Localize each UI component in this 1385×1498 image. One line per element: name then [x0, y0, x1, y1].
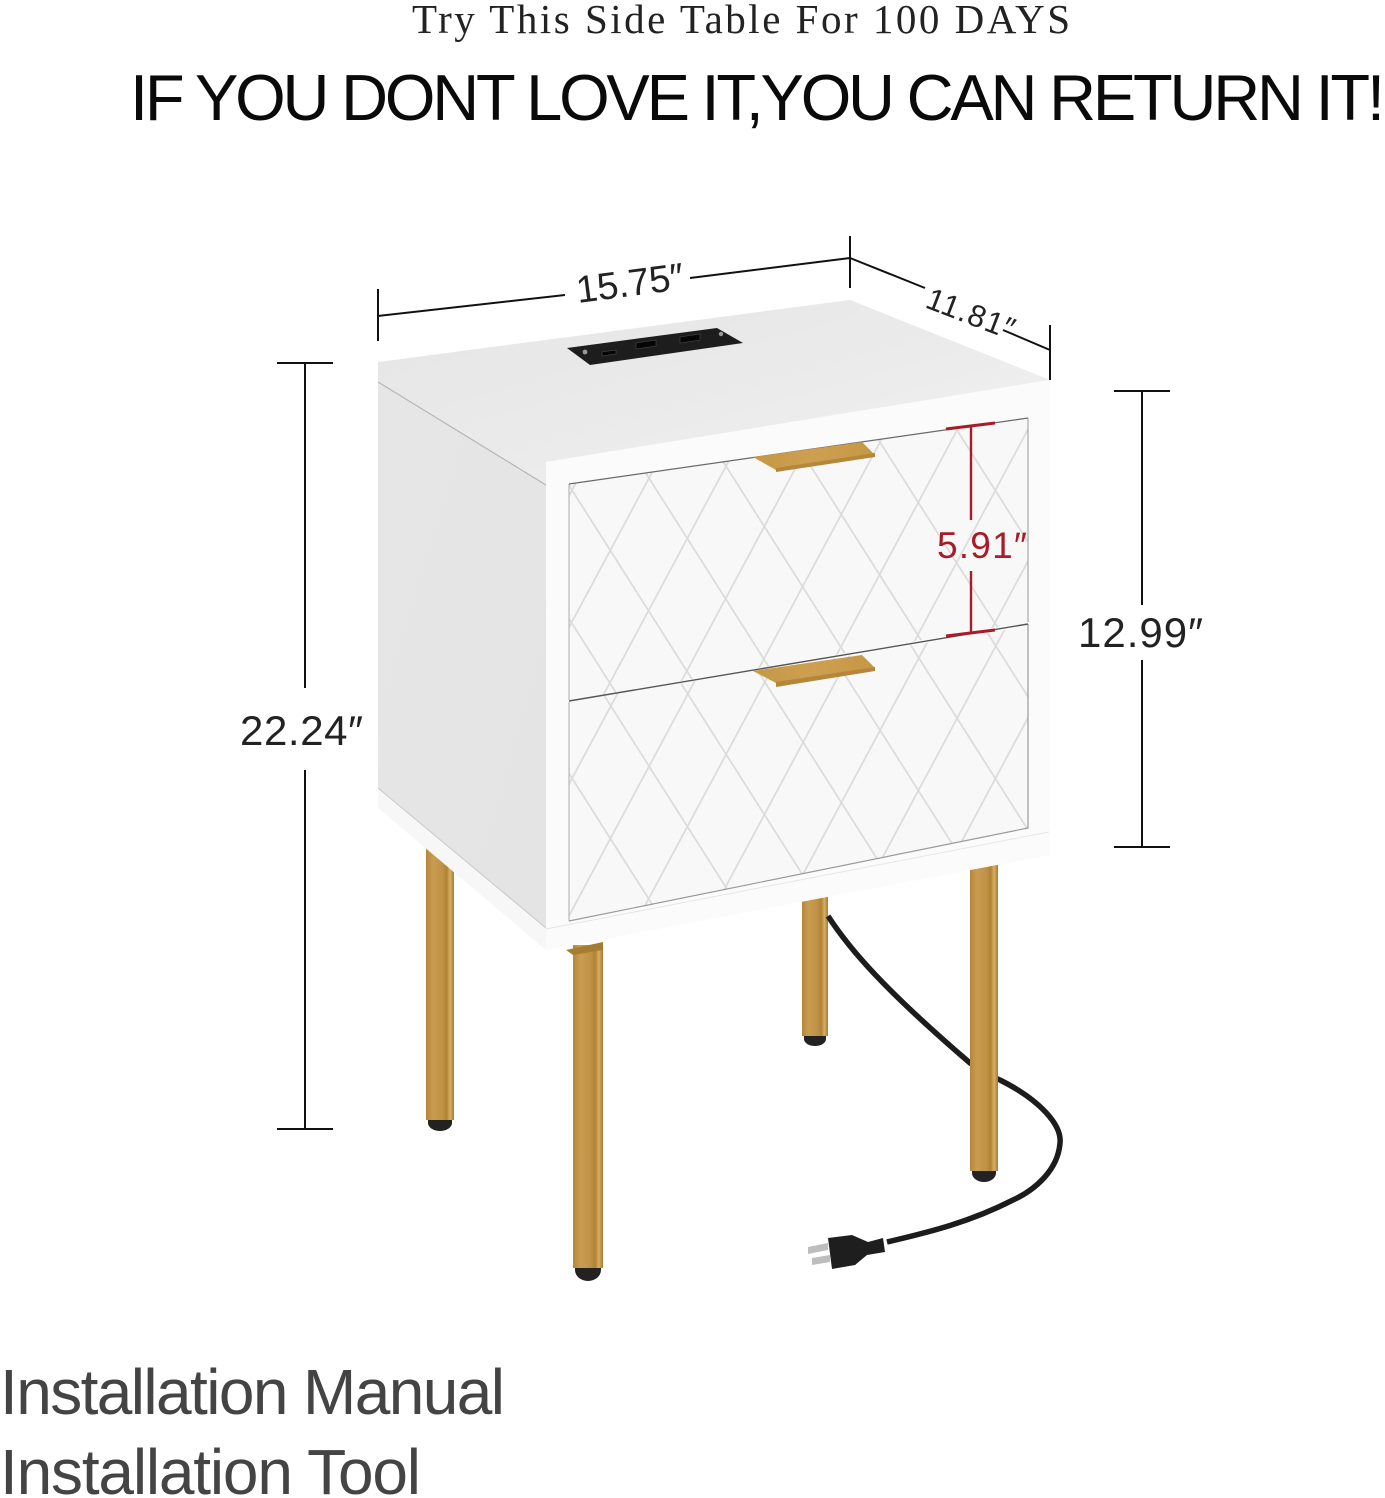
right front leg — [970, 855, 998, 1182]
lower drawer — [568, 623, 1029, 922]
included item: installation manual: Installation Manual — [0, 1356, 505, 1428]
dimension: depth 11.81 — [850, 258, 1050, 380]
front left leg — [566, 942, 603, 1281]
dimension: height 22.24 — [240, 363, 363, 1129]
dimension: drawer height 5.91 — [937, 423, 1027, 636]
table cabinet — [378, 300, 1049, 930]
back left leg — [426, 845, 454, 1131]
dimension: width 15.75 — [378, 236, 850, 341]
upper drawer diamond pattern — [570, 428, 1028, 694]
dimension: body height 12.99: 12.99″ — [1078, 609, 1203, 656]
back right leg — [802, 890, 828, 1046]
side panel — [378, 382, 546, 928]
lower handle — [753, 655, 875, 687]
power socket strip — [567, 328, 743, 365]
main heading: IF YOU DONT LOVE IT,YOU CAN RETURN IT! — [130, 61, 1385, 134]
dimension: body height 12.99 — [1078, 391, 1203, 847]
plug prongs — [808, 1243, 830, 1265]
upper handle — [753, 442, 875, 472]
dimension: height 22.24: 22.24″ — [240, 707, 363, 754]
power cord with plug — [808, 916, 1060, 1269]
plug body — [828, 1235, 885, 1269]
dimension: depth 11.81: 11.81″ — [921, 281, 1020, 347]
front frame — [546, 380, 1050, 950]
bottom slab edge — [378, 788, 546, 950]
dimension: drawer height 5.91: 5.91″ — [937, 525, 1027, 566]
upper drawer — [568, 417, 1029, 700]
top surface — [378, 300, 1050, 485]
dimension: width 15.75: 15.75″ — [574, 256, 686, 312]
lower drawer diamond pattern — [570, 630, 1028, 916]
